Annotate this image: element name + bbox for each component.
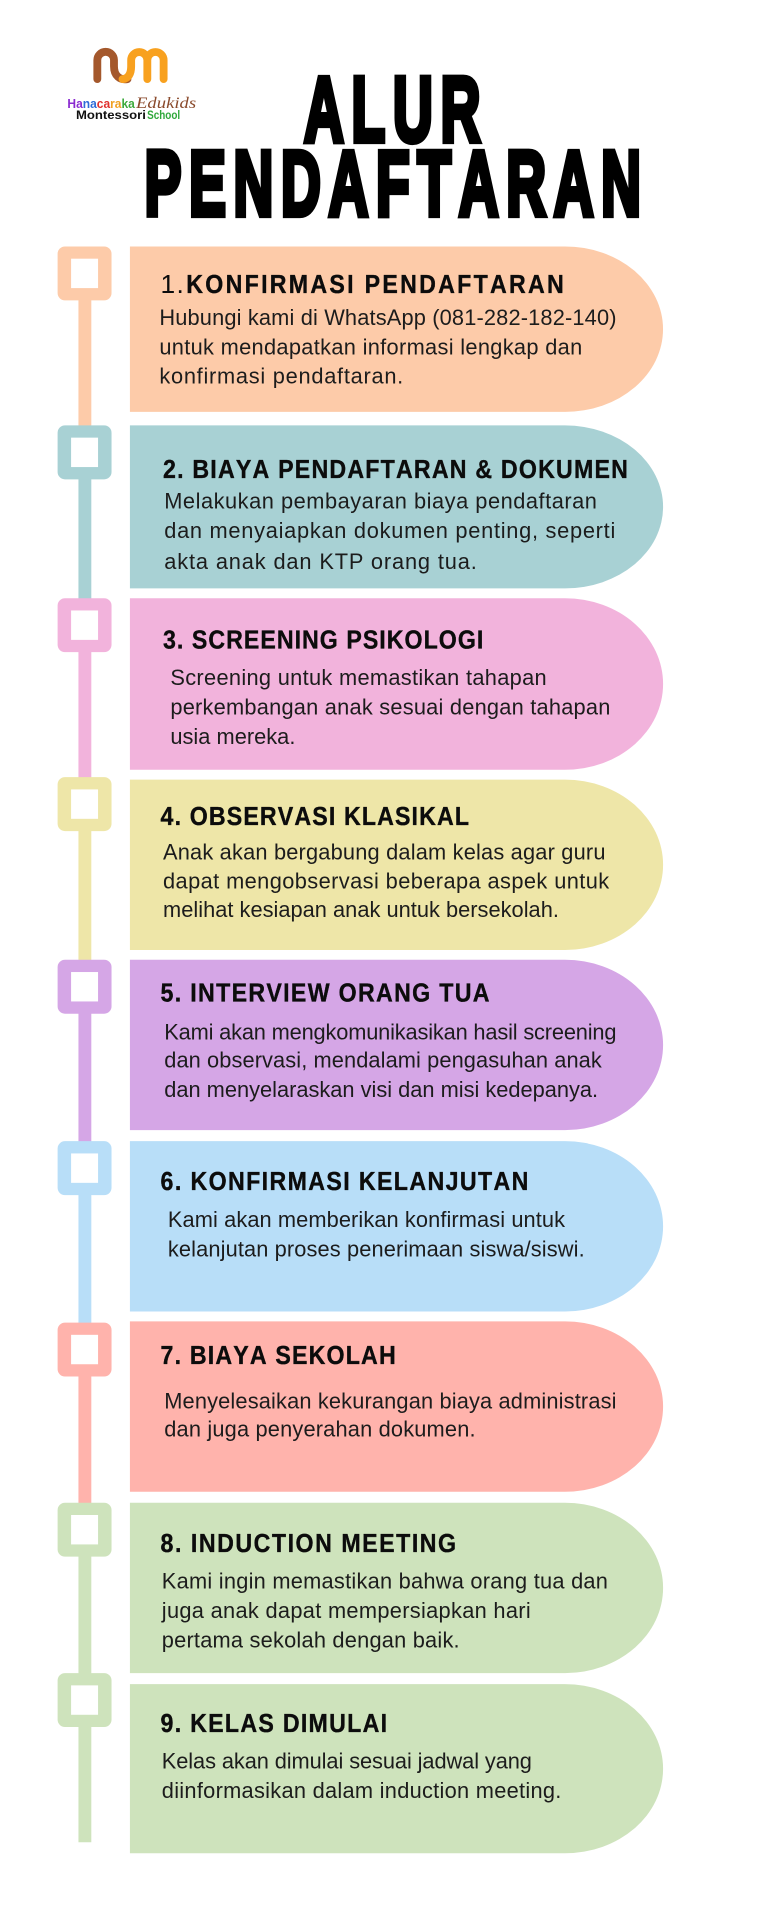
panel: step 9: Kelas akan dimulai sesuai jadwal yang: [162, 1749, 532, 1774]
logo: Hanacaraka Edukids Montessori School: Edukids: [135, 95, 196, 112]
panel: step 4: dapat mengobservasi beberapa aspek untuk: [163, 869, 609, 894]
panel: step 8: pertama sekolah dengan baik.: [162, 1627, 460, 1652]
panel: step 3: perkembangan anak sesuai dengan tahapan: [170, 695, 610, 720]
panel: step 2: akta anak dan KTP orang tua.: [164, 549, 477, 574]
panel: step 8: 8. INDUCTION MEETING: [161, 1529, 456, 1558]
panel: step 4: [130, 780, 663, 950]
logo: Hanacaraka Edukids Montessori School: School: [147, 108, 180, 122]
panel: step 5: 5. INTERVIEW ORANG TUA: [161, 979, 490, 1008]
panel: step 6: kelanjutan proses penerimaan siswa/siswi.: [168, 1236, 585, 1261]
panel: step 4: Anak akan bergabung dalam kelas agar guru: [163, 839, 605, 864]
panel: step 7: Menyelesaikan kekurangan biaya administrasi: [164, 1388, 617, 1413]
logo: Hanacaraka Edukids Montessori School: Hanacaraka: [67, 96, 136, 111]
panel: step 2: 2. BIAYA PENDAFTARAN & DOKUMEN: [163, 456, 628, 484]
timeline step 8 marker: [58, 1503, 112, 1678]
panel: step 6: Kami akan memberikan konfirmasi untuk: [168, 1207, 565, 1232]
timeline step 7 marker: [58, 1323, 112, 1508]
panel: step 7: dan juga penyerahan dokumen.: [164, 1417, 476, 1442]
timeline step 9 marker: [58, 1673, 112, 1842]
timeline step 3 marker: [58, 598, 112, 782]
timeline step 1 marker: [58, 246, 112, 429]
panel: step 5: dan observasi, mendalami pengasuhan anak: [164, 1048, 602, 1073]
title: ALUR: [304, 59, 480, 162]
panel: step 3: [130, 598, 663, 770]
panel: step 1: Hubungi kami di WhatsApp (081-282-182-140): [159, 305, 617, 330]
panel: step 7: 7. BIAYA SEKOLAH: [161, 1342, 396, 1371]
title: PENDAFTARAN: [145, 133, 641, 236]
panel: step 4: 4. OBSERVASI KLASIKAL: [161, 803, 469, 831]
logo: Hanacaraka Edukids Montessori School: Montessori: [76, 108, 146, 122]
panel: step 6: [130, 1141, 663, 1312]
title: [145, 59, 641, 236]
panel: step 1: untuk mendapatkan informasi lengkap dan: [159, 334, 582, 359]
panel: step 8: [130, 1503, 663, 1673]
panel: step 2: dan menyaiapkan dokumen penting, seperti: [164, 518, 615, 543]
panel: step 5: [130, 960, 663, 1130]
timeline step 4 marker: [58, 777, 112, 963]
panel: step 5: dan menyelaraskan visi dan misi kedepanya.: [164, 1077, 598, 1102]
timeline step 2 marker: [58, 425, 112, 602]
panel: step 2: Melakukan pembayaran biaya pendaftaran: [164, 489, 597, 514]
panel: step 3: 3. SCREENING PSIKOLOGI: [163, 626, 483, 655]
panel: step 6: 6. KONFIRMASI KELANJUTAN: [161, 1168, 528, 1197]
panel: step 1: konfirmasi pendaftaran.: [159, 364, 403, 389]
panel: step 3: Screening untuk memastikan tahapan: [170, 665, 547, 690]
panel: step 2: [130, 425, 663, 588]
panel: step 1: KONFIRMASI PENDAFTARAN: [186, 271, 564, 299]
panel: step 1: 1.: [161, 269, 184, 299]
panel: step 9: 9. KELAS DIMULAI: [161, 1710, 387, 1738]
panel: step 4: melihat kesiapan anak untuk bersekolah.: [163, 897, 559, 922]
logo: Hanacaraka Edukids Montessori School: [67, 52, 196, 122]
timeline step 5 marker: [58, 960, 112, 1146]
panel: step 5: Kami akan mengkomunikasikan hasil screening: [164, 1019, 617, 1044]
panel: step 1: [130, 246, 663, 412]
panel: step 8: Kami ingin memastikan bahwa orang tua dan: [162, 1569, 608, 1594]
panel: step 8: juga anak dapat mempersiapkan hari: [161, 1598, 531, 1623]
panel: step 7: [130, 1321, 663, 1492]
timeline step 6 marker: [58, 1141, 112, 1327]
panel: step 9: [130, 1684, 663, 1853]
panel: step 9: diinformasikan dalam induction meeting.: [162, 1778, 561, 1803]
panel: step 3: usia mereka.: [170, 724, 295, 749]
